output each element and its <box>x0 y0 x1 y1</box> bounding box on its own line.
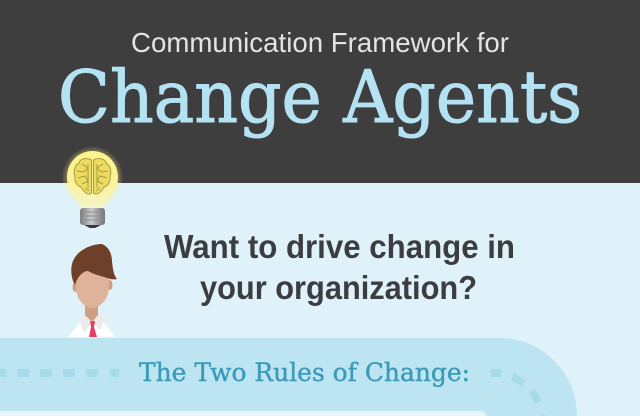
question heading: your organization? <box>200 269 477 306</box>
brain <box>74 159 111 194</box>
road band <box>0 338 577 416</box>
face <box>76 268 109 308</box>
collar <box>80 312 105 333</box>
subheading: The Two Rules of Change: The Two Rules of Change: <box>139 358 470 387</box>
title: Change Agents: Change Agents <box>58 55 582 139</box>
question heading: Want to drive change in <box>164 228 515 265</box>
header panel <box>0 0 640 183</box>
road dashes <box>0 369 546 416</box>
question heading <box>164 228 515 306</box>
person illustration <box>68 244 117 337</box>
tie <box>89 321 97 337</box>
hair <box>71 244 117 285</box>
shirt <box>68 320 115 337</box>
neck <box>85 300 98 322</box>
icon: light bulb with brain <box>62 146 124 228</box>
white panel top edge <box>0 411 487 416</box>
ears <box>72 282 78 292</box>
title line: Communication Framework for: Communication Framework for <box>131 27 509 58</box>
bulb base <box>80 208 105 225</box>
